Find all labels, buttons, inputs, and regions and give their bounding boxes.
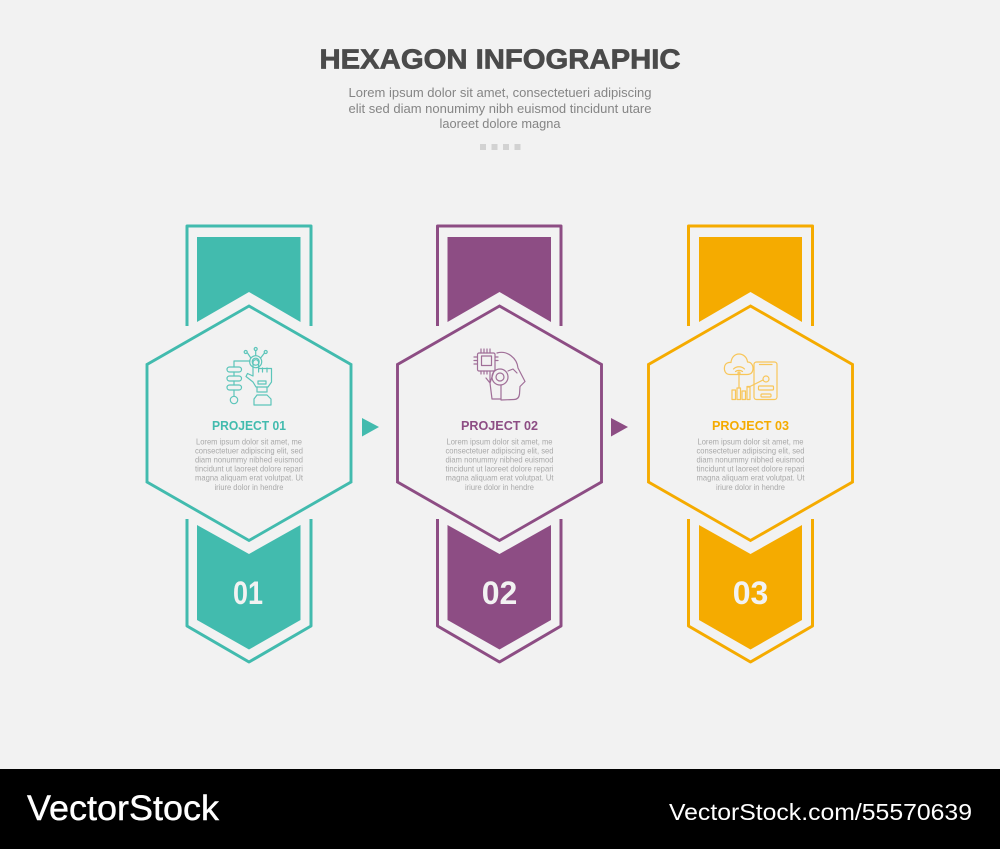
icon: robot hand and flowchart: [227, 348, 272, 405]
number 01: 01: [233, 575, 263, 611]
footer band: [0, 769, 1000, 849]
text block 02: tincidunt ut laoreet dolore repari: [446, 464, 554, 474]
arrow 1: [362, 418, 379, 436]
bottom ribbon 03: [699, 525, 802, 650]
top frame 01: [187, 226, 311, 326]
text block 01: consectetuer adipiscing elit, sed: [195, 446, 303, 456]
top ribbon 02: [448, 237, 551, 322]
title dots: [480, 144, 520, 150]
heading 01: PROJECT 01: [212, 419, 286, 433]
heading 03: PROJECT 03: [712, 419, 789, 433]
text block 03: consectetuer adipiscing elit, sed: [696, 446, 804, 456]
text block 03: Lorem ipsum dolor sit amet, me: [698, 438, 804, 446]
panel: project 03: [648, 226, 852, 662]
hexagon 01: [147, 306, 351, 540]
hexagon 02: [398, 306, 602, 540]
subtitle text block: laoreet dolore magna: [440, 117, 560, 131]
number 03: 03: [733, 575, 768, 611]
text block 01: magna aliquam erat volutpat. Ut: [195, 474, 304, 482]
subtitle text block: [348, 86, 652, 131]
subtitle text block: elit sed diam nonumimy nibh euismod tincidunt utare: [348, 102, 652, 116]
panel: project 02: [398, 226, 602, 662]
subtitle text block: Lorem ipsum dolor sit amet, consectetueri adipiscing: [348, 86, 652, 100]
text block 01: [195, 438, 304, 492]
footer logo: VectorStock: [27, 789, 220, 828]
text block 01: Lorem ipsum dolor sit amet, me: [196, 438, 302, 446]
bottom frame 01: [187, 519, 311, 662]
top frame 03: [688, 226, 812, 326]
bottom frame 02: [438, 519, 561, 662]
text block 02: Lorem ipsum dolor sit amet, me: [446, 438, 553, 446]
hexagon 03: [648, 306, 852, 540]
bottom frame 03: [688, 519, 812, 662]
arrow 2: [611, 418, 628, 436]
text block 03: tincidunt ut laoreet dolore repari: [696, 464, 805, 474]
number 02: 02: [482, 575, 517, 611]
bottom ribbon 02: [448, 525, 551, 650]
icon: cloud and phone: [724, 354, 777, 400]
text block 01: tincidunt ut laoreet dolore repari: [195, 464, 303, 474]
panel: project 01: [147, 226, 351, 662]
top ribbon 03: [699, 237, 802, 322]
text block 02: [446, 438, 554, 492]
text block 02: diam nonummy nibhed euismod: [446, 456, 554, 464]
top ribbon 01: [197, 237, 300, 322]
title: HEXAGON INFOGRAPHIC: [320, 44, 681, 74]
text block 02: consectetuer adipiscing elit, sed: [446, 446, 554, 456]
bottom ribbon 01: [197, 525, 300, 650]
text block 03: magna aliquam erat volutpat. Ut: [696, 474, 805, 482]
text block 01: iriure dolor in hendre: [214, 483, 284, 492]
text block 03: diam nonummy nibhed euismod: [696, 456, 804, 464]
heading 02: PROJECT 02: [461, 419, 538, 433]
top frame 02: [438, 226, 561, 326]
text block 03: iriure dolor in hendre: [716, 483, 785, 492]
text block 02: magna aliquam erat volutpat. Ut: [446, 474, 554, 482]
footer url: VectorStock.com/55570639: [669, 799, 972, 825]
text block 02: iriure dolor in hendre: [465, 483, 534, 492]
icon: AI head with chip: [474, 349, 525, 400]
text block 01: diam nonummy nibhed euismod: [195, 456, 303, 464]
text block 03: [696, 438, 805, 492]
